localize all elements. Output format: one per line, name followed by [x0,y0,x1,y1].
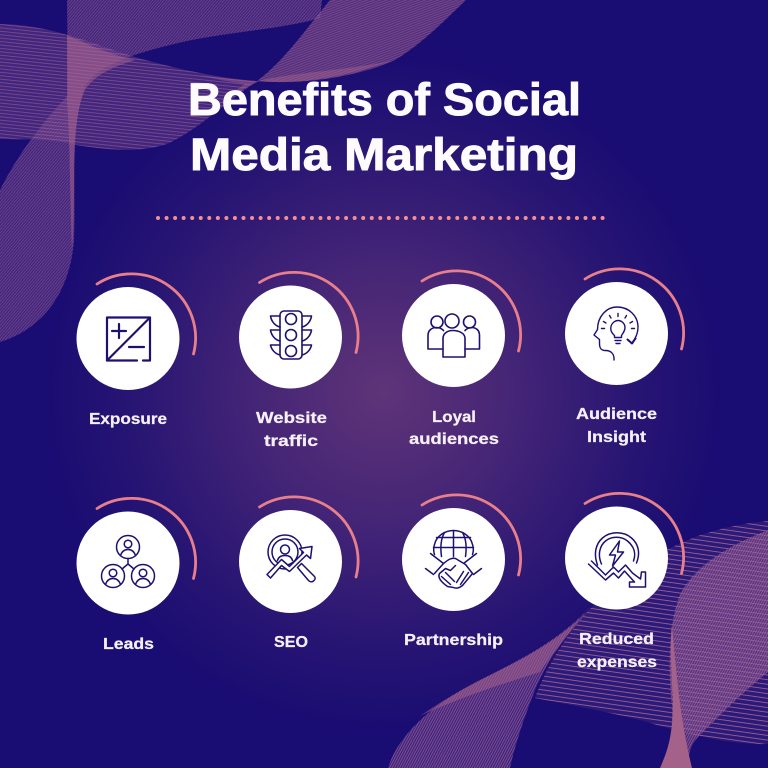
item: SEO [239,497,358,651]
title [188,74,581,180]
label: Partnership: Partnership [404,632,503,649]
label: Leads: Leads [103,636,154,653]
label: Website traffic: Website [256,410,327,427]
icon: exposure [107,318,150,360]
label: Reduced expenses [577,631,657,671]
label: Exposure: Exposure [89,411,167,428]
item: Audience Insight [565,269,684,446]
dotted divider [158,216,604,220]
label: Reduced expenses: Reduced [579,631,654,648]
item: Leads [76,498,196,653]
item: Reduced expenses [565,493,684,671]
icon: target with rising arrow [267,535,315,582]
icon: head with light bulb [594,307,638,360]
label: Loyal audiences [409,409,499,448]
label: Website traffic [256,410,327,450]
wave mesh: top left [0,0,466,342]
item: Partnership [402,495,521,649]
label: Website traffic: traffic [264,433,318,450]
item: Website traffic [239,272,358,450]
label: Loyal audiences: audiences [409,431,499,448]
label: SEO: SEO [274,634,308,651]
title: Media Marketing [190,129,578,180]
label: Audience Insight [576,406,657,446]
icon: lightning with falling arrow [588,533,646,587]
label: Audience Insight: Insight [587,429,647,446]
item: Exposure [76,274,196,428]
item: Loyal audiences [402,271,521,448]
wave mesh: bottom right [388,521,768,768]
label: Reduced expenses: expenses [577,654,657,671]
title: Benefits of Social [188,74,581,125]
icon: globe and handshake [426,530,482,588]
icon: traffic light [270,311,312,359]
label: Loyal audiences: Loyal [432,409,476,426]
icon: connected people [102,536,154,588]
label: Audience Insight: Audience [576,406,657,423]
icon: people [428,314,480,357]
